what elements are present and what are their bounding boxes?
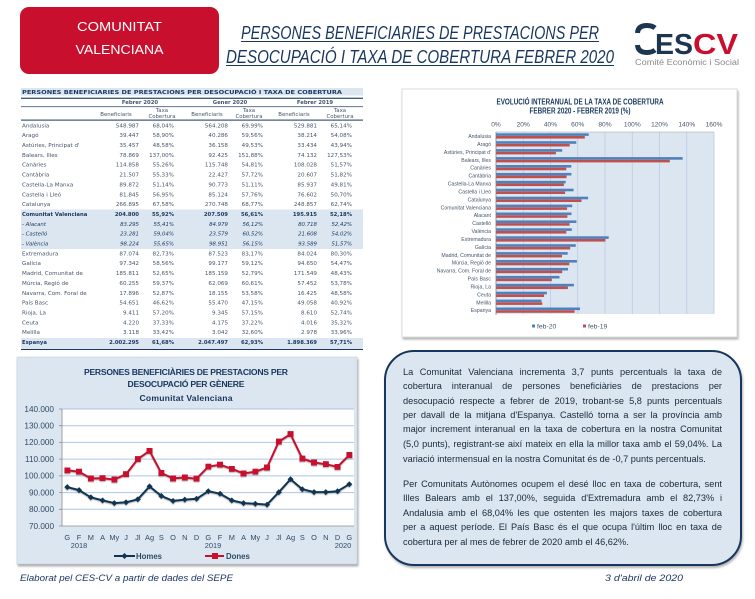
y axis labels: 90.000 bbox=[29, 488, 54, 497]
data table: beneficiaries and coverage rate: 51,57% bbox=[331, 242, 352, 248]
data table: beneficiaries and coverage rate: 18.155 bbox=[208, 291, 228, 297]
data table: beneficiaries and coverage rate: 57,72% bbox=[242, 173, 263, 179]
bar chart: year-on-year coverage rate bbox=[402, 89, 737, 337]
data table: beneficiaries and coverage rate: Cobertura bbox=[148, 114, 176, 120]
data table: beneficiaries and coverage rate: 248.857 bbox=[294, 202, 317, 208]
text block: second paragraph: Illes Balears amb el 137,00%, seguida d'Extremadura amb el 82,73% i bbox=[403, 493, 722, 503]
data table: beneficiaries and coverage rate: 58,90% bbox=[153, 133, 174, 139]
x axis labels: Ag bbox=[286, 533, 295, 542]
data table: beneficiaries and coverage rate: Febrer 2019 bbox=[297, 100, 333, 106]
bar chart legend: feb-19 bbox=[588, 324, 607, 330]
data table: beneficiaries and coverage rate: 51,11% bbox=[242, 182, 263, 188]
x axis labels: F bbox=[218, 533, 223, 542]
x axis labels: D bbox=[194, 533, 199, 542]
category labels: Andalusia bbox=[468, 134, 491, 140]
series: Homes bbox=[67, 479, 349, 505]
data table: beneficiaries and coverage rate: 35,32% bbox=[331, 320, 352, 326]
data table: beneficiaries and coverage rate: 60,52% bbox=[242, 232, 263, 238]
x axis labels: My bbox=[109, 533, 120, 542]
category labels: Melilla bbox=[476, 300, 491, 306]
data table: beneficiaries and coverage rate: Madrid, Comunitat de bbox=[22, 271, 83, 277]
line chart: beneficiaries by gender bbox=[17, 357, 357, 564]
data table: beneficiaries and coverage rate: 266.895 bbox=[116, 202, 139, 208]
data table: beneficiaries and coverage rate: Aragó bbox=[22, 132, 39, 139]
category labels: Castella i Lleó bbox=[458, 189, 491, 195]
data table: beneficiaries and coverage rate: 57,15% bbox=[242, 310, 263, 316]
data table: beneficiaries and coverage rate: 51,82% bbox=[331, 173, 352, 179]
title bbox=[226, 23, 614, 67]
data table: beneficiaries and coverage rate: 65,14% bbox=[331, 123, 352, 129]
data table: beneficiaries and coverage rate: Cobertura bbox=[326, 114, 354, 120]
data table: beneficiaries and coverage rate: 56,61% bbox=[241, 212, 264, 218]
data table: beneficiaries and coverage rate: Febrer 2020 bbox=[122, 100, 158, 106]
data table: beneficiaries and coverage rate: 80.718 bbox=[298, 222, 318, 228]
data table: beneficiaries and coverage rate: 62.069 bbox=[208, 281, 228, 287]
data table: beneficiaries and coverage rate: 16.425 bbox=[297, 291, 317, 297]
axis labels: 20% bbox=[517, 122, 530, 128]
bars: feb-19 bbox=[496, 136, 670, 313]
data table: beneficiaries and coverage rate: 171.549 bbox=[294, 271, 317, 277]
line chart title: Comunitat Valenciana bbox=[140, 393, 233, 403]
data table: beneficiaries and coverage rate: 55.470 bbox=[208, 301, 228, 307]
data table: beneficiaries and coverage rate: 36.158 bbox=[208, 143, 228, 149]
x axis labels: My bbox=[250, 533, 261, 542]
data table: beneficiaries and coverage rate: 40.286 bbox=[208, 133, 228, 139]
data table: beneficiaries and coverage rate: 69,99% bbox=[242, 123, 263, 129]
data table: beneficiaries and coverage rate: 37,33% bbox=[153, 320, 174, 326]
data table: beneficiaries and coverage rate: Melilla bbox=[22, 330, 40, 336]
data table: beneficiaries and coverage rate: 35.457 bbox=[119, 143, 139, 149]
line chart legend bbox=[114, 552, 250, 561]
data table: beneficiaries and coverage rate: 21.608 bbox=[298, 232, 318, 238]
data table: beneficiaries and coverage rate: País Basc bbox=[22, 300, 48, 307]
text block: first paragraph: La Comunitat Valenciana incrementa 3,7 punts percentuals la taxa de bbox=[403, 367, 722, 377]
category labels: Extremadura bbox=[461, 237, 491, 243]
category labels: Catalunya bbox=[468, 197, 491, 203]
data table: beneficiaries and coverage rate: 82,73% bbox=[153, 251, 174, 257]
data table: beneficiaries and coverage rate: 85.124 bbox=[208, 192, 228, 198]
x axis labels: G bbox=[205, 533, 211, 542]
text block: first paragraph: desocupació respecte a febrer de 2019, trobant-se 5,8 punts percentuals bbox=[403, 396, 722, 406]
data table: beneficiaries and coverage rate: 46,62% bbox=[153, 301, 174, 307]
data table: beneficiaries and coverage rate: 37,22% bbox=[242, 320, 263, 326]
title: DESOCUPACIÓ I TAXA DE COBERTURA FEBRER 2020 bbox=[226, 46, 614, 67]
x axis labels: M bbox=[88, 533, 94, 542]
category labels: Madrid, Comunitat de bbox=[441, 253, 491, 259]
data table: beneficiaries and coverage rate: 57,71% bbox=[330, 340, 353, 346]
data table: beneficiaries and coverage rate: 52,18% bbox=[330, 212, 353, 218]
data table: beneficiaries and coverage rate: 52,65% bbox=[153, 271, 174, 277]
y axis labels: 130.000 bbox=[24, 422, 54, 430]
data table: beneficiaries and coverage rate: Beneficiaris bbox=[100, 112, 132, 118]
y axis labels: 80.000 bbox=[29, 505, 54, 514]
data table: beneficiaries and coverage rate: Taxa bbox=[333, 108, 346, 114]
data table: beneficiaries and coverage rate: 33,42% bbox=[153, 330, 174, 336]
text block: first paragraph bbox=[403, 367, 722, 464]
axis labels: 120% bbox=[651, 122, 668, 128]
x axis labels: Ag bbox=[145, 533, 154, 542]
data table: beneficiaries and coverage rate: 68,77% bbox=[242, 202, 263, 208]
category labels: Rioja, La bbox=[471, 284, 491, 290]
series: Dones bbox=[67, 434, 349, 480]
category labels: València bbox=[471, 229, 491, 235]
text block: first paragraph: variació intermensual en la nostra Comunitat és de -0,7 punts percentuals. bbox=[403, 454, 706, 464]
data table: beneficiaries and coverage rate: 55,92% bbox=[152, 212, 175, 218]
category labels: Castella-La Manxa bbox=[448, 182, 491, 188]
axis labels: 60% bbox=[571, 122, 584, 128]
logo: CES-CV: CV bbox=[693, 29, 739, 61]
text block: first paragraph: major increment interanual en la taxa de cobertura en la nostra Comunitat bbox=[403, 424, 722, 434]
text block: second paragraph bbox=[403, 479, 722, 547]
data table: beneficiaries and coverage rate: 8.610 bbox=[301, 310, 317, 316]
data table: beneficiaries and coverage rate: 1.898.369 bbox=[287, 340, 317, 346]
category labels: Alacant bbox=[474, 213, 492, 219]
category labels: Ceuta bbox=[477, 292, 491, 298]
data table: beneficiaries and coverage rate: 83.295 bbox=[120, 222, 140, 228]
data table: beneficiaries and coverage rate: 9.345 bbox=[212, 310, 228, 316]
text block: second paragraph: per a aquest període. El País Basc és el que ocupa l'últim lloc en taxa de bbox=[403, 522, 722, 532]
bar chart legend: feb-20 bbox=[537, 324, 556, 330]
x axis labels: M bbox=[229, 533, 235, 542]
data table: beneficiaries and coverage rate: 53,78% bbox=[331, 281, 352, 287]
data table: beneficiaries and coverage rate: 23.281 bbox=[120, 232, 139, 238]
data table: beneficiaries and coverage rate: 108.028 bbox=[294, 163, 317, 169]
data table: beneficiaries and coverage rate: Castella-La Manxa bbox=[22, 182, 73, 188]
logo: CES-CV: ES bbox=[655, 29, 693, 61]
bar chart title: EVOLUCIÓ INTERANUAL DE LA TAXA DE COBERTURA bbox=[496, 98, 664, 106]
data table: beneficiaries and coverage rate: - Castelló bbox=[22, 231, 48, 238]
y axis labels bbox=[24, 405, 54, 531]
data table: beneficiaries and coverage rate: Rioja, La bbox=[22, 310, 46, 316]
x axis labels: 2018 bbox=[71, 541, 87, 550]
category labels: Cantàbria bbox=[468, 174, 491, 180]
data table: beneficiaries and coverage rate: 52,42% bbox=[331, 222, 352, 228]
data table: beneficiaries and coverage rate: 270.748 bbox=[205, 202, 228, 208]
category labels: Comunitat Valenciana bbox=[441, 205, 491, 211]
data table: beneficiaries and coverage rate: 49.058 bbox=[297, 301, 317, 307]
data table: beneficiaries and coverage rate: 40,92% bbox=[331, 301, 352, 307]
data table: beneficiaries and coverage rate: 564.208 bbox=[205, 123, 228, 129]
data table: beneficiaries and coverage rate: 55,41% bbox=[153, 222, 174, 228]
date: 3 d'abril de 2020 bbox=[605, 572, 684, 583]
data table: beneficiaries and coverage rate: Cobertura bbox=[235, 114, 263, 120]
data table: beneficiaries and coverage rate: 89.872 bbox=[119, 182, 139, 188]
category labels: Navarra, Com. Foral de bbox=[437, 269, 491, 275]
data table: beneficiaries and coverage rate: 33,96% bbox=[331, 330, 352, 336]
data table: beneficiaries and coverage rate: 90.773 bbox=[208, 182, 228, 188]
data table: beneficiaries and coverage rate: Taxa bbox=[155, 108, 168, 114]
text block: second paragraph: cobertura per al mes de febrer de 2020 amb el 46,62%. bbox=[403, 537, 629, 547]
y axis labels: 140.000 bbox=[24, 405, 54, 414]
data table: beneficiaries and coverage rate: Cantàbria bbox=[22, 172, 49, 179]
line chart title bbox=[84, 367, 289, 403]
bar chart legend bbox=[532, 324, 607, 330]
data table: beneficiaries and coverage rate: 62,93% bbox=[241, 340, 264, 346]
data table: beneficiaries and coverage rate: 76.602 bbox=[297, 192, 317, 198]
x axis labels: 2020 bbox=[335, 541, 351, 550]
data table: beneficiaries and coverage rate: 20.607 bbox=[297, 173, 317, 179]
data table: beneficiaries and coverage rate: 98.951 bbox=[209, 242, 228, 248]
category labels: País Basc bbox=[468, 277, 491, 283]
data table: beneficiaries and coverage rate: Canàries bbox=[22, 162, 47, 169]
data table: beneficiaries and coverage rate: 52,87% bbox=[153, 291, 174, 297]
data table: beneficiaries and coverage rate: 85.937 bbox=[297, 182, 317, 188]
data table: beneficiaries and coverage rate: Astúries, Principat d' bbox=[22, 142, 80, 149]
data table: beneficiaries and coverage rate: 84.979 bbox=[209, 222, 229, 228]
data table: beneficiaries and coverage rate: 52,79% bbox=[242, 271, 263, 277]
data table: beneficiaries and coverage rate: 23.579 bbox=[209, 232, 229, 238]
axis labels: 40% bbox=[544, 122, 557, 128]
x axis labels: 2019 bbox=[205, 541, 221, 550]
y axis labels: 120.000 bbox=[24, 438, 54, 447]
data table: beneficiaries and coverage rate: 137,00% bbox=[149, 153, 174, 159]
axis labels: 0% bbox=[491, 122, 501, 128]
data table: beneficiaries and coverage rate: Gener 2020 bbox=[213, 100, 248, 106]
data table: beneficiaries and coverage rate: 4.175 bbox=[212, 320, 228, 326]
data table: beneficiaries and coverage rate: 47,15% bbox=[242, 301, 263, 307]
y axis labels: 100.000 bbox=[24, 472, 54, 481]
category labels: Galícia bbox=[475, 245, 491, 251]
data table: beneficiaries and coverage rate: Beneficiaris bbox=[191, 112, 223, 118]
data table: beneficiaries and coverage rate: 48,58% bbox=[153, 143, 174, 149]
data table: beneficiaries and coverage rate: 4.016 bbox=[301, 320, 317, 326]
data table: beneficiaries and coverage rate: 67,58% bbox=[153, 202, 174, 208]
data table: beneficiaries and coverage rate: 52,74% bbox=[331, 310, 352, 316]
logo: CES-CV bbox=[635, 26, 739, 67]
data table: beneficiaries and coverage rate: Espanya bbox=[22, 340, 47, 346]
text block: first paragraph: per davall de la mitjana d'Espanya. Castelló torna a ser la província amb bbox=[403, 410, 722, 420]
region badge: Comunitat Valenciana bbox=[20, 7, 219, 74]
data table: beneficiaries and coverage rate: 62,74% bbox=[331, 202, 352, 208]
y axis labels: 110.000 bbox=[25, 455, 54, 464]
data table: beneficiaries and coverage rate: 59,37% bbox=[153, 281, 174, 287]
data table: beneficiaries and coverage rate: 51,57% bbox=[331, 163, 352, 169]
line chart title: DESOCUPACIÓ PER GÈNERE bbox=[128, 378, 245, 389]
category labels: Canàries bbox=[470, 166, 491, 172]
data table: beneficiaries and coverage rate: 58,56% bbox=[153, 261, 174, 267]
data table: beneficiaries and coverage rate: 55,33% bbox=[153, 173, 174, 179]
bar chart title bbox=[496, 98, 664, 116]
data table: beneficiaries and coverage rate: 2.002.295 bbox=[109, 340, 139, 346]
data table: beneficiaries and coverage rate: 49,81% bbox=[331, 182, 352, 188]
x axis labels: S bbox=[159, 533, 164, 542]
x axis labels: N bbox=[182, 533, 187, 542]
data table: beneficiaries and coverage rate: Extremadura bbox=[22, 251, 58, 257]
data table: beneficiaries and coverage rate: Catalunya bbox=[22, 202, 50, 208]
data table: beneficiaries and coverage rate: 2.047.497 bbox=[198, 340, 228, 346]
data table: beneficiaries and coverage rate: 55,26% bbox=[153, 163, 174, 169]
x axis labels: A bbox=[241, 533, 246, 542]
data table: beneficiaries and coverage rate: 97.342 bbox=[119, 261, 139, 267]
data table: beneficiaries and coverage rate: 84.024 bbox=[297, 251, 317, 257]
data table: beneficiaries and coverage rate: 9.411 bbox=[123, 310, 139, 316]
category labels: Múrcia, Regió de bbox=[452, 261, 491, 267]
data table: beneficiaries and coverage rate: Ceuta bbox=[22, 320, 39, 326]
category labels: Aragó bbox=[477, 142, 491, 148]
panel: commentary box bbox=[384, 350, 742, 566]
category labels: Balears, Illes bbox=[461, 158, 491, 164]
data table: beneficiaries and coverage rate: 17.896 bbox=[119, 291, 139, 297]
data table: beneficiaries and coverage rate: 80,30% bbox=[331, 251, 352, 257]
data table: beneficiaries and coverage rate: 32,60% bbox=[242, 330, 263, 336]
data table: beneficiaries and coverage rate: 185.159 bbox=[205, 271, 228, 277]
data table: beneficiaries and coverage rate: 3.042 bbox=[212, 330, 228, 336]
data table: beneficiaries and coverage rate: 92.425 bbox=[208, 153, 228, 159]
data table: beneficiaries and coverage rate: 78.869 bbox=[119, 153, 139, 159]
data table: beneficiaries and coverage rate: Galícia bbox=[22, 260, 41, 267]
logo: CES-CV: Comité Econòmic i Social bbox=[635, 58, 739, 67]
data table: beneficiaries and coverage rate: 55,65% bbox=[153, 242, 174, 248]
category labels: Astúries, Principat d' bbox=[444, 150, 491, 156]
data table: beneficiaries and coverage rate: 51,14% bbox=[153, 182, 174, 188]
data table: beneficiaries and coverage rate: 4.220 bbox=[123, 320, 139, 326]
data table: beneficiaries and coverage rate: 529.881 bbox=[294, 123, 317, 129]
data table: beneficiaries and coverage rate: Andalusia bbox=[22, 123, 49, 129]
data table: beneficiaries and coverage rate: 60,61% bbox=[242, 281, 263, 287]
data table: beneficiaries and coverage rate: Múrcia, Regió de bbox=[22, 280, 69, 287]
data table: beneficiaries and coverage rate: 195.915 bbox=[293, 212, 317, 218]
data table: beneficiaries and coverage rate: 57,20% bbox=[153, 310, 174, 316]
line chart legend: Dones bbox=[226, 552, 250, 561]
data table: beneficiaries and coverage rate: 548.987 bbox=[116, 123, 139, 129]
data table: beneficiaries and coverage rate: 39.447 bbox=[119, 133, 139, 139]
text block: first paragraph: (5,0 punts), registrant-se així mateix en ella la millor taxa amb el 59,04%. La bbox=[403, 439, 722, 449]
x axis labels: S bbox=[300, 533, 305, 542]
x axis labels: Jl bbox=[276, 533, 282, 542]
data table: beneficiaries and coverage rate: 21.507 bbox=[119, 173, 139, 179]
text block: second paragraph: Per Comunitats Autònomes ocupem el desé lloc en taxa de cobertura, sent bbox=[403, 479, 722, 489]
data table: beneficiaries and coverage rate: 99.177 bbox=[208, 261, 228, 267]
data table: beneficiaries and coverage rate: 56,15% bbox=[242, 242, 263, 248]
data table: beneficiaries and coverage rate: Comunitat Valenciana bbox=[22, 212, 88, 218]
data table: beneficiaries and coverage rate: - Alacant bbox=[22, 222, 47, 228]
x axis labels: F bbox=[77, 533, 82, 542]
category labels: Espanya bbox=[471, 308, 491, 314]
region badge: Comunitat Valenciana: COMUNITAT bbox=[77, 19, 162, 34]
data table: beneficiaries and coverage rate: Beneficiaris bbox=[278, 112, 310, 118]
data table: beneficiaries and coverage rate: 57.452 bbox=[297, 281, 317, 287]
data table: beneficiaries and coverage rate: 59,12% bbox=[242, 261, 263, 267]
data table: beneficiaries and coverage rate: 3.118 bbox=[123, 330, 139, 336]
data table: beneficiaries and coverage rate: 87.523 bbox=[208, 251, 228, 257]
x axis labels: O bbox=[170, 533, 176, 542]
data table: beneficiaries and coverage rate: 59,04% bbox=[153, 232, 174, 238]
data table: beneficiaries and coverage rate: 2.978 bbox=[301, 330, 317, 336]
x axis labels: A bbox=[100, 533, 105, 542]
axis labels: 160% bbox=[706, 122, 723, 128]
x axis labels: N bbox=[323, 533, 328, 542]
source note: Elaborat pel CES-CV a partir de dades del SEPE bbox=[20, 572, 234, 583]
x axis labels: O bbox=[311, 533, 317, 542]
category labels bbox=[437, 134, 492, 314]
x axis labels bbox=[64, 533, 352, 550]
data table: beneficiaries and coverage rate: 114.858 bbox=[116, 163, 139, 169]
data table: beneficiaries and coverage rate: 74.132 bbox=[297, 153, 317, 159]
x axis labels: D bbox=[335, 533, 340, 542]
line chart title: PERSONES BENEFICIÀRIES DE PRESTACIONS PER bbox=[84, 367, 289, 377]
text block: second paragraph: Andalusia amb el 68,04% les que ostenten les majors taxes de cobertura bbox=[403, 508, 722, 518]
data table: beneficiaries and coverage rate: 49,53% bbox=[242, 143, 263, 149]
data table: beneficiaries and coverage rate: 98.224 bbox=[120, 242, 140, 248]
data table: beneficiaries and coverage rate: 57,76% bbox=[242, 192, 263, 198]
data table: beneficiaries and coverage rate: 115.748 bbox=[205, 163, 228, 169]
data table: beneficiaries and coverage rate: 53,58% bbox=[242, 291, 263, 297]
data table: beneficiaries and coverage rate: 185.811 bbox=[116, 271, 139, 277]
x axis labels: J bbox=[124, 533, 128, 542]
data table: beneficiaries and coverage rate: 87.074 bbox=[119, 251, 139, 257]
data table: beneficiaries and coverage rate: 54,02% bbox=[331, 232, 352, 238]
data table: beneficiaries and coverage rate: 68,04% bbox=[153, 123, 174, 129]
data table: beneficiaries and coverage rate: 59,56% bbox=[242, 133, 263, 139]
x axis labels: G bbox=[346, 533, 352, 542]
y axis labels: 70.000 bbox=[29, 522, 54, 531]
axis labels bbox=[491, 122, 723, 128]
data table: beneficiaries and coverage rate: 56,95% bbox=[153, 192, 174, 198]
x axis labels: Jl bbox=[135, 533, 141, 542]
data table: beneficiaries and coverage rate: 61,68% bbox=[152, 340, 175, 346]
data table: beneficiaries and coverage rate: 54,47% bbox=[331, 261, 352, 267]
data table: beneficiaries and coverage rate: 204.800 bbox=[115, 212, 139, 218]
data table: beneficiaries and coverage rate: 54.651 bbox=[119, 301, 139, 307]
data table: beneficiaries and coverage rate: Taxa bbox=[242, 108, 255, 114]
data table: beneficiaries and coverage rate: 56,12% bbox=[242, 222, 263, 228]
region badge: Comunitat Valenciana: VALENCIANA bbox=[76, 42, 164, 57]
data table: beneficiaries and coverage rate: 48,43% bbox=[331, 271, 352, 277]
data table: beneficiaries and coverage rate: 50,70% bbox=[331, 192, 352, 198]
data table: beneficiaries and coverage rate: 54,81% bbox=[242, 163, 263, 169]
data table: beneficiaries and coverage rate: 94.650 bbox=[297, 261, 317, 267]
data table: beneficiaries and coverage rate: 127,53% bbox=[327, 153, 352, 159]
x axis labels: G bbox=[64, 533, 70, 542]
bars: feb-20 bbox=[496, 133, 683, 310]
data table: beneficiaries and coverage rate: 38.214 bbox=[297, 133, 317, 139]
text block: first paragraph: cobertura interanual de persones beneficiàries de prestacions per bbox=[403, 381, 722, 391]
data table: beneficiaries and coverage rate: PERSONES BENEFICIARIES DE PRESTACIONS PER DESOCUPACIÓ I TAXA DE COBERTURA bbox=[22, 89, 343, 96]
data table: beneficiaries and coverage rate: Castella i Lleó bbox=[22, 191, 62, 198]
data table: beneficiaries and coverage rate: 60.255 bbox=[119, 281, 139, 287]
data table: beneficiaries and coverage rate: Balears, Illes bbox=[22, 153, 58, 159]
data table: beneficiaries and coverage rate: 48,58% bbox=[331, 291, 352, 297]
data table: beneficiaries and coverage rate: Navarra, Com. Foral de bbox=[22, 291, 87, 297]
data table: beneficiaries and coverage rate: 43,94% bbox=[331, 143, 352, 149]
line chart legend: Homes bbox=[136, 552, 163, 561]
data table: beneficiaries and coverage rate: - València bbox=[22, 240, 48, 248]
data table: beneficiaries and coverage rate: 93.589 bbox=[298, 242, 318, 248]
data table: beneficiaries and coverage rate: 151,88% bbox=[238, 153, 263, 159]
x axis labels: J bbox=[265, 533, 269, 542]
title: PERSONES BENEFICIARIES DE PRESTACIONS PER bbox=[241, 23, 599, 43]
data table: beneficiaries and coverage rate: 81.845 bbox=[119, 192, 139, 198]
data table: beneficiaries and coverage rate: 22.427 bbox=[208, 173, 228, 179]
data table: beneficiaries and coverage rate bbox=[21, 88, 363, 350]
data table: beneficiaries and coverage rate: 54,08% bbox=[331, 133, 352, 139]
category labels: Castelló bbox=[472, 221, 491, 227]
bar chart title: FEBRER 2020 - FEBRER 2019 (%) bbox=[530, 106, 631, 116]
axis labels: 140% bbox=[678, 122, 695, 128]
data table: beneficiaries and coverage rate: 83,17% bbox=[242, 251, 263, 257]
data table: beneficiaries and coverage rate: 207.509 bbox=[204, 212, 228, 218]
data table: beneficiaries and coverage rate: 33.434 bbox=[297, 143, 317, 149]
axis labels: 80% bbox=[598, 122, 612, 128]
axis labels: 100% bbox=[624, 122, 641, 128]
